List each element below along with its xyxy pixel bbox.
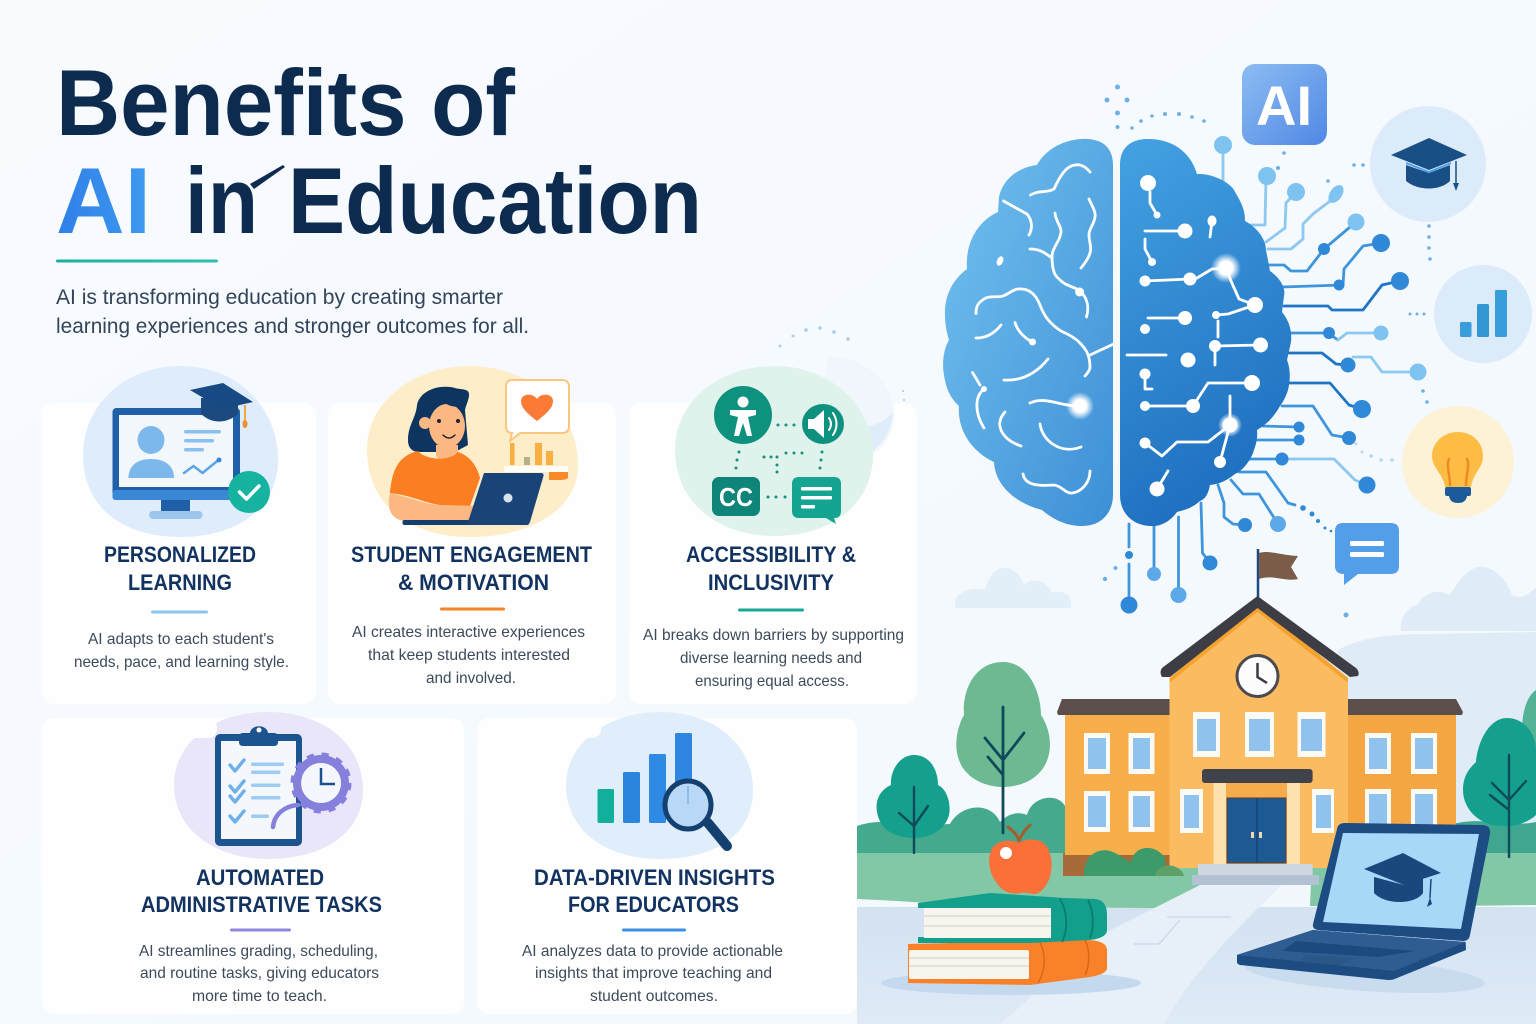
heading bbox=[141, 865, 382, 917]
title: in bbox=[185, 148, 258, 253]
laptop bbox=[1237, 823, 1490, 999]
body text bbox=[643, 627, 904, 690]
body text: AI analyzes data to provide actionable bbox=[522, 943, 783, 960]
school flag bbox=[1258, 549, 1298, 597]
outer circuit traces bbox=[1129, 145, 1418, 605]
book shadow bbox=[881, 971, 1141, 995]
panel: accessibility bbox=[629, 326, 917, 704]
heading bbox=[534, 865, 775, 917]
panel: personalized learning bbox=[42, 366, 316, 704]
brain: left hemisphere bbox=[943, 139, 1113, 526]
heading: PERSONALIZED bbox=[104, 542, 256, 567]
body text: diverse learning needs and bbox=[680, 650, 862, 667]
lawn bbox=[857, 853, 1536, 908]
body text: and routine tasks, giving educators bbox=[140, 965, 379, 982]
body text: that keep students interested bbox=[368, 647, 570, 664]
body text: insights that improve teaching and bbox=[535, 965, 772, 982]
subtitle: AI is transforming education by creating smarter bbox=[56, 286, 503, 309]
icon: student at laptop bbox=[367, 366, 578, 537]
heading: INCLUSIVITY bbox=[708, 570, 834, 595]
subtitle: learning experiences and stronger outcomes for all. bbox=[56, 315, 529, 338]
body text bbox=[522, 943, 783, 1005]
title: Education bbox=[288, 148, 702, 253]
faint sphere behind accessibility icon bbox=[778, 326, 905, 458]
apple bbox=[989, 825, 1052, 894]
tree: small left bbox=[877, 755, 950, 853]
bushes bbox=[857, 798, 1536, 860]
body text bbox=[74, 631, 289, 671]
tree: large left bbox=[956, 662, 1050, 833]
heading: LEARNING bbox=[128, 570, 232, 595]
illustration: campus scene bbox=[857, 549, 1536, 1024]
heading bbox=[104, 542, 256, 595]
ground bbox=[857, 907, 1536, 1024]
icon: clipboard and clock gear bbox=[170, 712, 363, 859]
tree: right bbox=[1463, 690, 1536, 857]
body text: AI adapts to each student's bbox=[88, 631, 274, 648]
panel: data-driven insights bbox=[477, 712, 857, 1014]
heading bbox=[686, 542, 856, 595]
body text: AI breaks down barriers by supporting bbox=[643, 627, 904, 644]
title bbox=[56, 50, 702, 253]
icon: accessibility symbols: CC bbox=[719, 482, 753, 512]
icon: bar chart badge bbox=[1434, 265, 1532, 363]
footpath bbox=[1000, 885, 1282, 1024]
heading: ADMINISTRATIVE TASKS bbox=[141, 892, 382, 917]
school building bbox=[1057, 549, 1463, 885]
shrubs bbox=[1084, 848, 1165, 876]
heading: AUTOMATED bbox=[196, 865, 324, 890]
heading: ACCESSIBILITY & bbox=[686, 542, 856, 567]
body text: AI streamlines grading, scheduling, bbox=[139, 943, 378, 960]
body text: student outcomes. bbox=[590, 988, 718, 1005]
illustration: AI brain bbox=[943, 64, 1532, 618]
panel: student engagement bbox=[328, 366, 616, 704]
body text bbox=[139, 943, 379, 1005]
icon: bar chart and magnifier bbox=[560, 712, 753, 859]
outer circuit nodes bbox=[1103, 84, 1432, 618]
title: Benefits of bbox=[56, 50, 516, 155]
icon: graduation cap badge bbox=[1370, 106, 1486, 222]
heading: DATA-DRIVEN INSIGHTS bbox=[534, 865, 775, 890]
clouds and hill bbox=[955, 567, 1536, 860]
clock bbox=[1237, 656, 1278, 696]
body text: ensuring equal access. bbox=[695, 673, 849, 690]
body text: needs, pace, and learning style. bbox=[74, 654, 289, 671]
books bbox=[908, 893, 1107, 985]
entrance bbox=[1192, 769, 1319, 885]
icon: accessibility symbols bbox=[675, 366, 873, 536]
heading: & MOTIVATION bbox=[398, 570, 549, 595]
windows bbox=[1084, 712, 1437, 833]
body text: AI creates interactive experiences bbox=[352, 624, 585, 641]
subtitle bbox=[56, 286, 529, 338]
panel: automated administrative tasks bbox=[42, 712, 464, 1014]
body text bbox=[352, 624, 585, 687]
heading: FOR EDUCATORS bbox=[568, 892, 739, 917]
heading: STUDENT ENGAGEMENT bbox=[351, 542, 592, 567]
icon: AI badge: AI bbox=[1256, 74, 1312, 137]
right hemisphere circuits bbox=[1127, 175, 1268, 496]
body text: and involved. bbox=[426, 670, 516, 687]
left hemisphere folds bbox=[972, 165, 1114, 493]
icon: chat bubble bbox=[1335, 523, 1399, 585]
body text: more time to teach. bbox=[192, 988, 327, 1005]
icon: AI badge bbox=[1242, 64, 1327, 145]
brain: right hemisphere bbox=[1120, 139, 1291, 526]
title: AI bbox=[56, 148, 151, 253]
icon: monitor with graduation cap bbox=[83, 366, 278, 537]
heading bbox=[351, 542, 592, 595]
icon: lightbulb badge bbox=[1402, 406, 1514, 518]
